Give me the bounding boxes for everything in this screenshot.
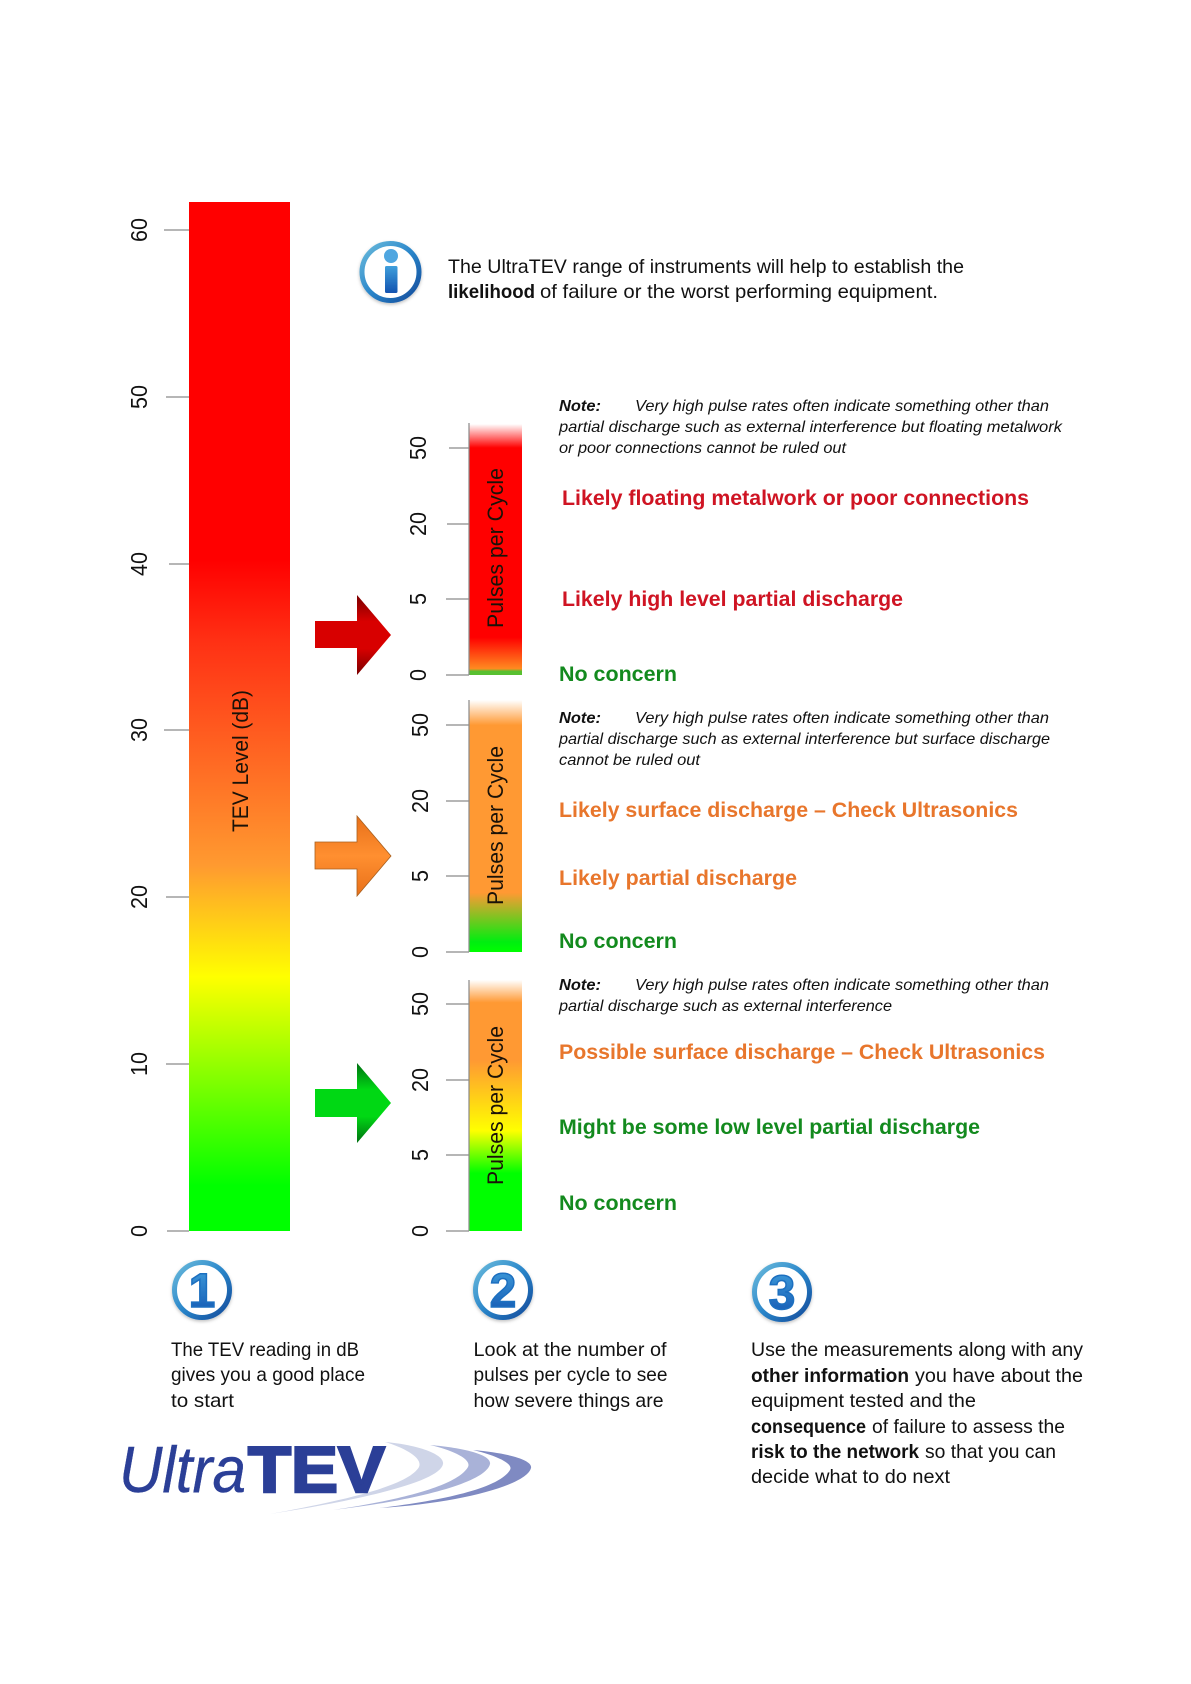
icon: information [362, 244, 419, 300]
TEV axis labels [126, 218, 152, 1237]
icon: number 2: 2 [490, 1265, 516, 1318]
icon: number 3 [754, 1264, 810, 1320]
TEV axis labels: 20 [126, 885, 152, 909]
step 1 text [171, 1339, 365, 1412]
logo: UltraTEV: Ultra [119, 1433, 246, 1506]
intro text: likelihood [448, 281, 535, 303]
panel: orange range notes: No concern [559, 929, 677, 953]
TEV axis labels: 0 [126, 1225, 152, 1237]
note: partial discharge such as external interference [558, 998, 892, 1015]
step 3 [751, 1264, 1083, 1488]
note: or poor connections cannot be ruled out [559, 440, 847, 457]
chart: pulses per cycle, orange range: 20 [407, 789, 433, 813]
step 3 text: so that you can [925, 1441, 1056, 1463]
step 2 text: pulses per cycle to see [474, 1364, 668, 1386]
step 3 text: equipment tested and the [751, 1390, 976, 1412]
note: Note: [559, 977, 601, 994]
step 3 text: you have about the [915, 1365, 1083, 1387]
chart: pulses per cycle, orange range: 5 [407, 870, 433, 882]
note: Very high pulse rates often indicate something other than [635, 710, 1049, 727]
chart: pulses per cycle, red range: Pulses per Cycle [483, 468, 508, 628]
chart: pulses per cycle, green range [407, 980, 522, 1237]
step 3 text: other information [751, 1365, 909, 1387]
panel: green range notes: Might be some low level partial discharge [559, 1115, 980, 1139]
chart: pulses per cycle, orange range [407, 700, 522, 958]
note [558, 710, 1050, 769]
step 2 text: how severe things are [474, 1390, 664, 1412]
chart: TEV level scale [126, 202, 290, 1237]
step 3 text: of failure to assess the [872, 1416, 1065, 1438]
note: Very high pulse rates often indicate something other than [635, 977, 1049, 994]
panel: orange range notes: Likely partial discharge [559, 866, 797, 890]
TEV gradient bar [189, 202, 290, 1231]
intro text: The UltraTEV range of instruments will help to establish the [448, 256, 964, 278]
TEV axis labels: 50 [126, 385, 152, 409]
chart: pulses per cycle, red range: 5 [405, 593, 431, 605]
panel: green range notes: No concern [559, 1191, 677, 1215]
panel: red range notes: Likely high level partial discharge [562, 587, 903, 611]
step 2 text [474, 1339, 668, 1412]
chart: pulses per cycle, red range: 20 [405, 512, 431, 536]
arrow: orange [315, 816, 391, 896]
chart: pulses per cycle, green range: 50 [407, 992, 433, 1016]
note: cannot be ruled out [559, 752, 701, 769]
note [558, 977, 1049, 1015]
chart: pulses per cycle, orange range: Pulses per Cycle [483, 746, 508, 905]
intro text: of failure or the worst performing equipment. [540, 281, 938, 303]
arrow: red [315, 595, 391, 675]
TEV axis labels: 40 [126, 552, 152, 576]
note: partial discharge such as external interference but floating metalwork [558, 419, 1063, 436]
chart: pulses per cycle, orange range: 0 [407, 946, 433, 958]
TEV axis labels: 30 [126, 718, 152, 742]
note: Note: [559, 398, 601, 415]
logo: UltraTEV [119, 1433, 531, 1514]
step 3 text: Use the measurements along with any [751, 1339, 1083, 1361]
note: partial discharge such as external interference but surface discharge [558, 731, 1050, 748]
intro text [448, 256, 964, 303]
icon: number 3: 3 [769, 1267, 795, 1320]
chart: pulses per cycle, red range: 50 [405, 436, 431, 460]
step 1 text: The TEV reading in dB [171, 1339, 359, 1361]
panel: red range notes: Likely floating metalwork or poor connections [562, 486, 1029, 510]
chart: pulses per cycle, orange range: 50 [407, 713, 433, 737]
panel: red range notes: No concern [559, 662, 677, 686]
note [558, 398, 1063, 457]
panel: red range notes [558, 398, 1063, 686]
logo swooshes [270, 1442, 531, 1514]
chart: pulses per cycle, green range: 0 [407, 1225, 433, 1237]
step 3 text: decide what to do next [751, 1466, 951, 1488]
icon: number 1 [174, 1262, 230, 1318]
logo: UltraTEV: TEV [248, 1433, 385, 1506]
icon: number 1: 1 [189, 1265, 215, 1318]
chart: pulses per cycle, red range [405, 423, 522, 681]
step 3 text: risk to the network [751, 1441, 919, 1463]
chart: pulses per cycle, red range: 0 [405, 669, 431, 681]
panel: green range notes: Possible surface discharge – Check Ultrasonics [559, 1040, 1045, 1064]
note: Very high pulse rates often indicate something other than [635, 398, 1049, 415]
step 2 text: Look at the number of [474, 1339, 667, 1361]
TEV axis labels: 60 [126, 218, 152, 242]
chart: pulses per cycle, green range: 5 [407, 1149, 433, 1161]
panel: orange range notes: Likely surface discharge – Check Ultrasonics [559, 798, 1018, 822]
step 3 text [751, 1339, 1083, 1488]
chart: pulses per cycle, green range: 20 [407, 1068, 433, 1092]
step 2 [474, 1262, 668, 1412]
step 3 text: consequence [751, 1416, 866, 1438]
icon: number 2 [476, 1262, 530, 1318]
arrow: green [315, 1063, 391, 1143]
step 1 text: gives you a good place [171, 1364, 365, 1386]
TEV axis labels: 10 [126, 1052, 152, 1076]
note: Note: [559, 710, 601, 727]
chart: pulses per cycle, green range: Pulses per Cycle [483, 1026, 508, 1185]
panel: orange range notes [558, 710, 1050, 953]
step 1 [171, 1262, 365, 1412]
step 1 text: to start [171, 1390, 235, 1412]
panel: green range notes [558, 977, 1049, 1215]
TEV axis title: TEV Level (dB) [228, 690, 253, 832]
